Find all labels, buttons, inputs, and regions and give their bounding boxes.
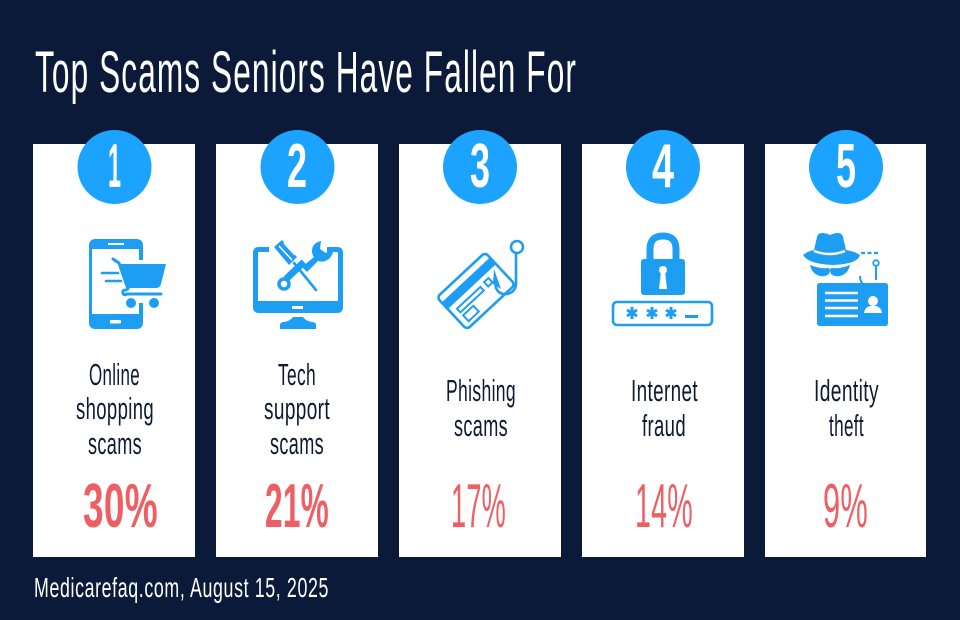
label: scams [270, 427, 324, 461]
label [446, 374, 516, 443]
number badge 3 [443, 130, 517, 204]
icon: monitor with tools [253, 240, 343, 329]
label: scams [454, 409, 508, 443]
number badge 4 [626, 130, 700, 204]
label: fraud [642, 409, 686, 443]
label [264, 358, 330, 461]
icon: padlock with password field [613, 236, 712, 325]
number badge 3: 3 [470, 132, 490, 201]
panel: phishing scams [399, 130, 561, 557]
number badge 4: 4 [652, 132, 674, 201]
number badge 1: 1 [108, 132, 121, 201]
label: Phishing [446, 374, 516, 408]
label: theft [829, 409, 864, 443]
label: Online [89, 358, 140, 392]
panel: phishing scams: 17% [451, 472, 506, 541]
source footer: Medicarefaq.com, August 15, 2025 [34, 572, 329, 603]
panel: online shopping scams [33, 130, 195, 557]
label: support [264, 392, 330, 426]
panel: tech support scams [216, 130, 378, 557]
label: scams [88, 427, 142, 461]
percentage: 21% [265, 472, 329, 541]
icon: spy and hooked ID card [803, 233, 888, 326]
icon: credit card on fishing hook [437, 241, 523, 330]
label [76, 358, 154, 461]
icon: phone with shopping cart [89, 239, 166, 329]
panel: identity theft: 9% [823, 472, 868, 541]
label: shopping [76, 392, 154, 426]
number badge 5: 5 [836, 132, 856, 201]
number badge 5 [809, 130, 883, 204]
label: Identity [814, 374, 879, 408]
panel: identity theft [765, 130, 926, 557]
label: Tech [278, 358, 316, 392]
number badge 2: 2 [287, 132, 307, 201]
label: Internet [631, 374, 698, 408]
panel: internet fraud [582, 130, 744, 557]
label [631, 374, 698, 443]
number badge 2 [260, 130, 334, 204]
number badge 1 [78, 130, 152, 204]
panel: internet fraud: 14% [635, 472, 693, 541]
percentage: 30% [83, 472, 158, 541]
label [814, 374, 879, 443]
